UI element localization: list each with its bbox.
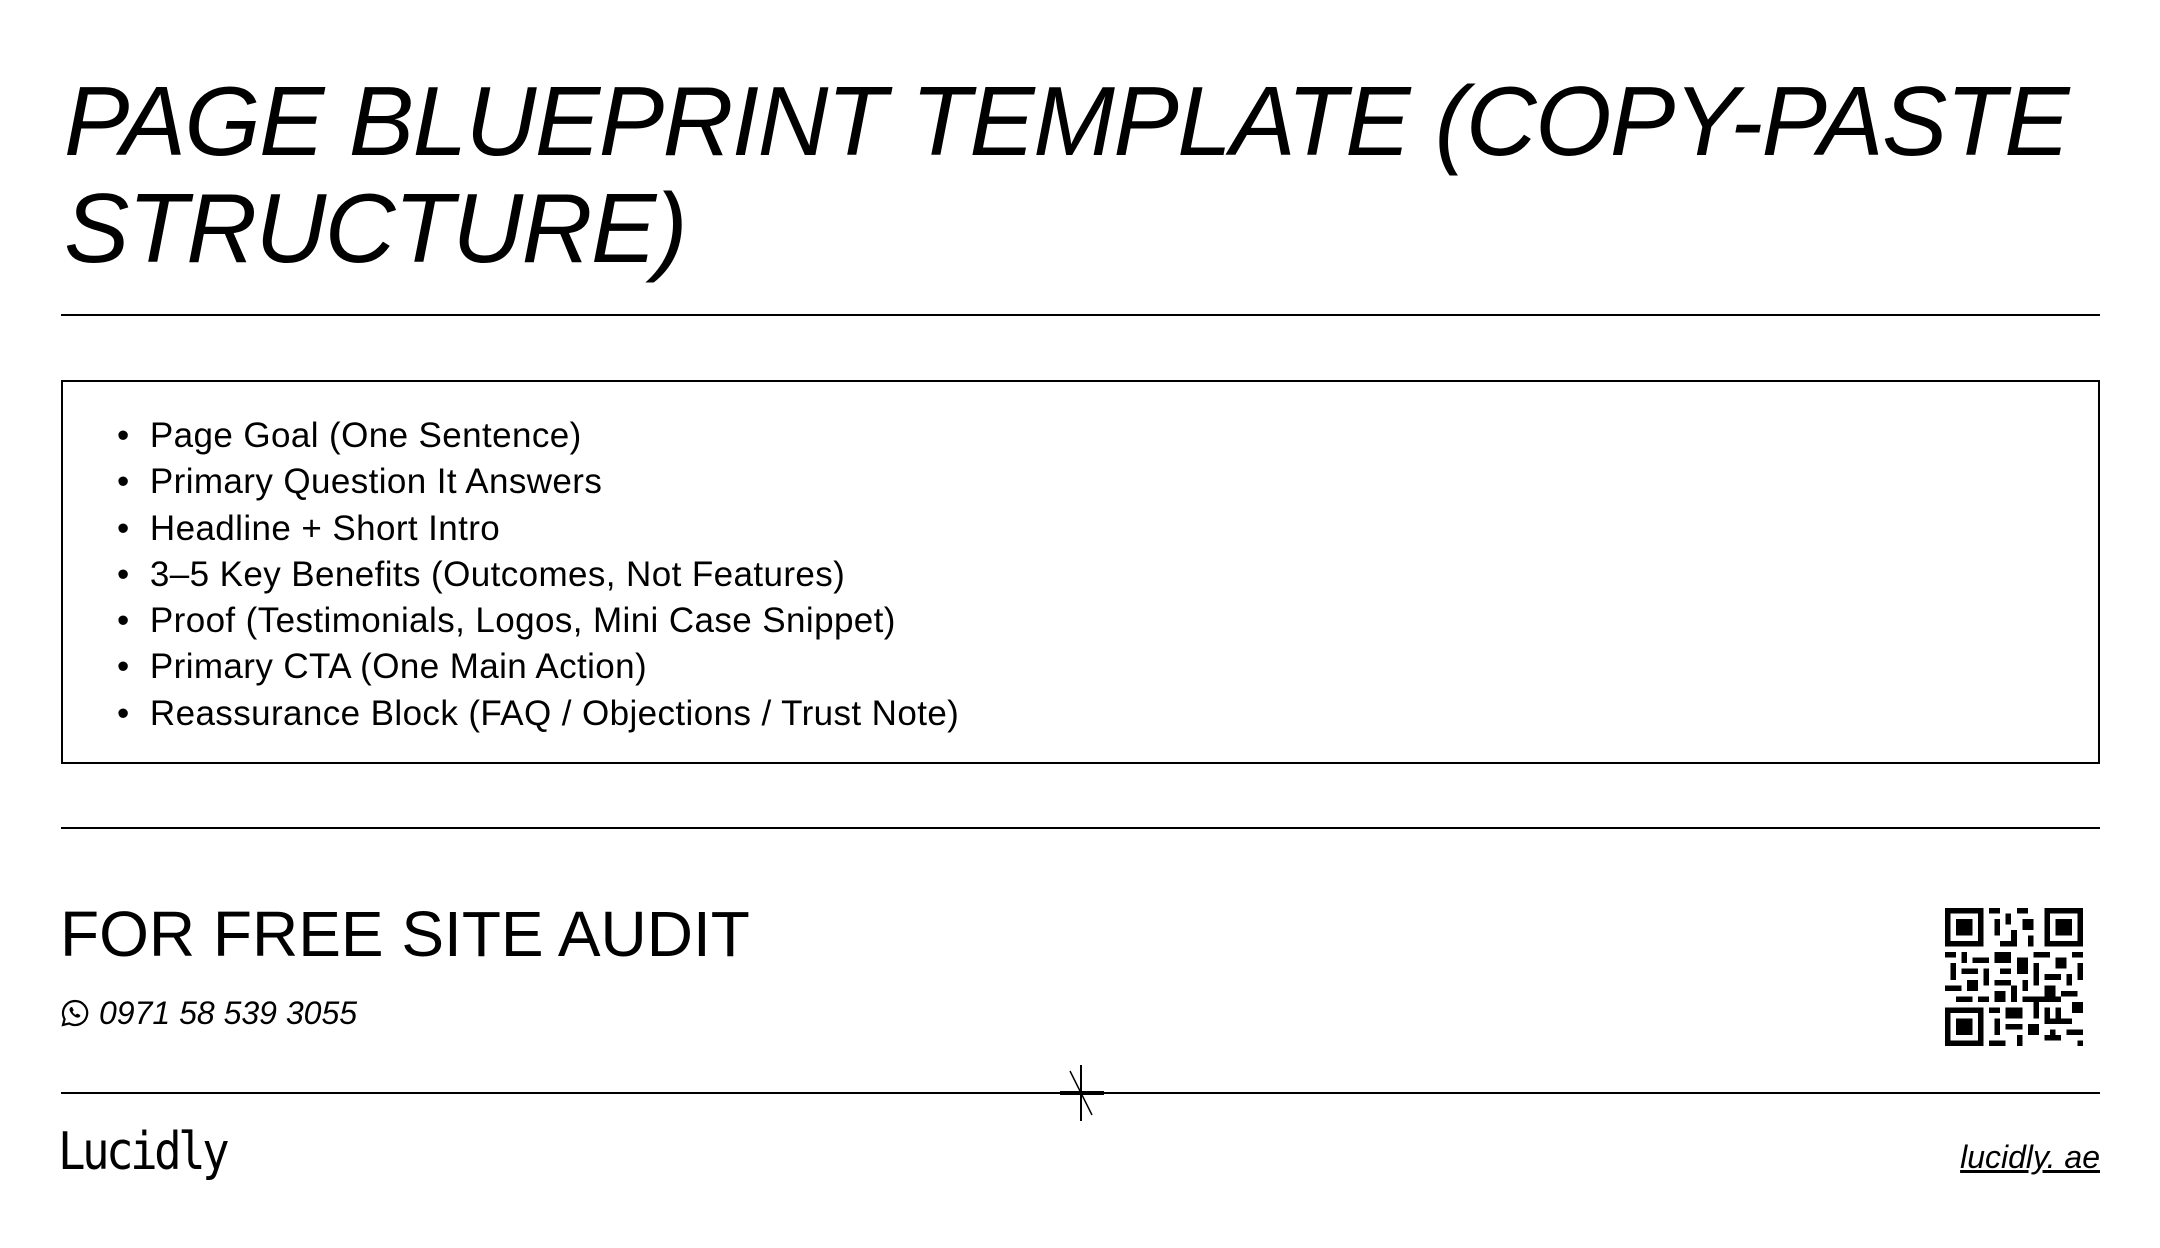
bullet list: • Page Goal (One Sentence) — [117, 416, 582, 455]
title: PAGE BLUEPRINT TEMPLATE (COPY-PASTE — [64, 66, 2068, 176]
bullet list — [117, 416, 959, 733]
bullet list: • 3–5 Key Benefits (Outcomes, Not Features) — [117, 555, 845, 594]
icon: whatsapp — [62, 1000, 88, 1026]
icon: crosshair marker — [1060, 1065, 1104, 1121]
title — [64, 66, 2070, 283]
contact phone: 0971 58 539 3055 — [99, 994, 357, 1030]
bullet list: • Proof (Testimonials, Logos, Mini Case Snippet) — [117, 601, 896, 640]
bullet list: • Reassurance Block (FAQ / Objections / Trust Note) — [117, 694, 959, 733]
bullet list: • Primary CTA (One Main Action) — [117, 647, 647, 686]
bullet list: • Headline + Short Intro — [117, 509, 500, 548]
logo: Lucidly: Lucidly — [58, 1122, 226, 1182]
QR code — [1945, 908, 2083, 1046]
panel: checklist box — [61, 380, 2100, 764]
link: lucidly.ae: lucidly. ae — [1960, 1139, 2100, 1175]
heading: free site audit: FOR FREE SITE AUDIT — [60, 898, 750, 970]
bullet list: • Primary Question It Answers — [117, 462, 602, 501]
title: STRUCTURE) — [64, 173, 686, 283]
